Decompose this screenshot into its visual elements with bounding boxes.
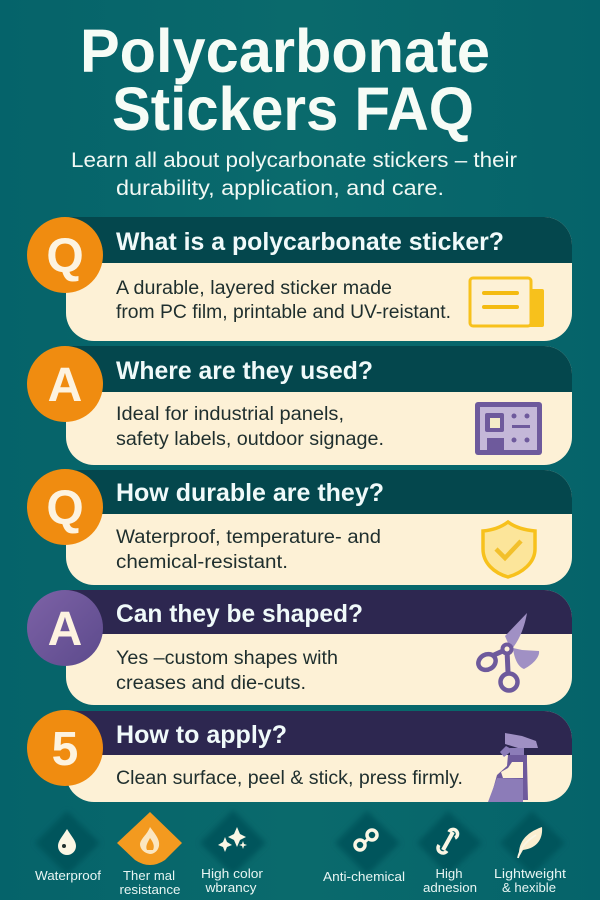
label: lightweight and flexible <box>494 866 566 895</box>
heading: How durable are they? <box>116 479 384 507</box>
panel: what is a polycarbonate sticker <box>27 217 572 341</box>
label: thermal resistance: Ther mal <box>123 868 175 883</box>
body text: Clean surface, peel & stick, press firmly. <box>116 768 463 789</box>
badge: A <box>27 346 103 422</box>
panel: can they be shaped <box>27 590 572 705</box>
label: high adhesion: High <box>436 866 462 881</box>
heading: Can they be shaped? <box>116 600 363 628</box>
label: waterproof: Waterproof <box>35 868 101 883</box>
icon: high adhesion <box>417 811 482 875</box>
icon: waterproof <box>35 811 100 875</box>
label: anti-chemical: Anti-chemical <box>323 869 405 884</box>
body text <box>116 527 381 573</box>
label: thermal resistance: resistance <box>120 882 180 897</box>
icon: anti-chemical <box>335 811 400 875</box>
badge: 5 <box>27 710 103 786</box>
label: lightweight and flexible: Lightweight <box>494 866 566 881</box>
body text: Waterproof, temperature- and <box>116 527 381 548</box>
body text: Yes –custom shapes with <box>116 648 338 669</box>
badge: Q: Q <box>46 230 84 283</box>
body text: safety labels, outdoor signage. <box>116 429 384 450</box>
label: high adhesion: adnesion <box>423 880 477 895</box>
heading: What is a polycarbonate sticker? <box>116 228 504 256</box>
body text <box>116 648 338 694</box>
icon: high color vibrancy <box>200 810 266 875</box>
panel: how durable are they <box>27 469 572 585</box>
label: high color vibrancy <box>201 866 264 895</box>
body text <box>116 278 451 323</box>
panel: how to apply <box>27 710 572 802</box>
icon: thermal resistance <box>117 812 182 865</box>
title: Stickers FAQ <box>112 75 474 143</box>
badge: A: A <box>48 359 82 412</box>
body text: creases and die-cuts. <box>116 673 306 694</box>
body text: Ideal for industrial panels, <box>116 404 344 425</box>
icon: control panel <box>475 402 542 455</box>
label: high adhesion <box>423 866 477 895</box>
label: high color vibrancy: wbrancy <box>204 880 257 895</box>
label: thermal resistance <box>120 868 180 897</box>
subtitle: durability, application, and care. <box>116 177 444 200</box>
badge: A: A <box>48 603 82 656</box>
subtitle <box>71 149 517 200</box>
body text: from PC film, printable and UV-reistant. <box>116 302 451 323</box>
badge: Q <box>27 469 103 545</box>
badge: 5: 5 <box>52 723 78 776</box>
badge: A <box>27 590 103 666</box>
label: lightweight and flexible: & hexible <box>502 880 556 895</box>
icon: lightweight and flexible <box>500 811 565 875</box>
heading: How to apply? <box>116 721 287 749</box>
subtitle: Learn all about polycarbonate stickers – their <box>71 149 517 172</box>
body text <box>116 404 384 450</box>
icon: scissors <box>475 613 539 690</box>
heading: Where are they used? <box>116 357 373 385</box>
badge: Q <box>27 217 103 293</box>
icon: sticker card <box>470 278 544 327</box>
body text: A durable, layered sticker made <box>116 278 392 299</box>
title <box>80 17 490 143</box>
title: Polycarbonate <box>80 17 490 85</box>
panel: where are they used <box>27 346 572 465</box>
icon: spray bottle <box>488 733 538 802</box>
icon: shield <box>483 522 535 577</box>
label: high color vibrancy: High color <box>201 866 264 881</box>
body text: chemical-resistant. <box>116 552 288 573</box>
badge: Q: Q <box>46 482 84 535</box>
